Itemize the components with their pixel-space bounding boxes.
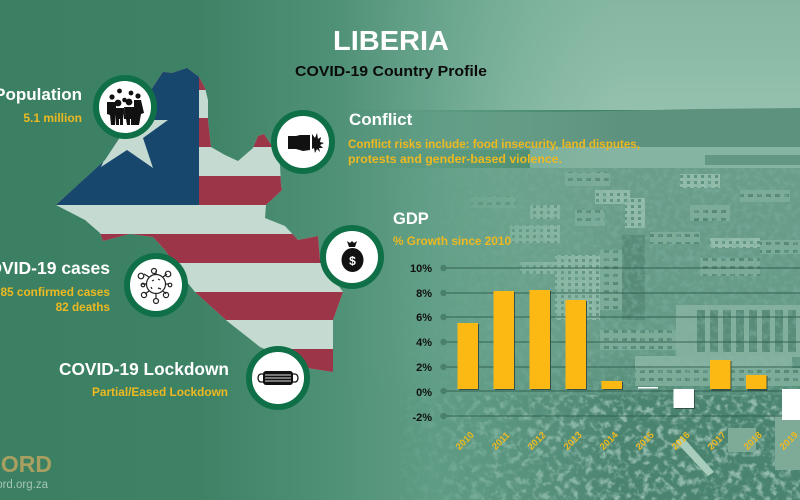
bar chart: GDP growth (410, 263, 800, 453)
yellow bars (458, 290, 766, 389)
x axis year labels: 2012 (526, 430, 549, 453)
COVID-19 cases block (0, 258, 110, 314)
x axis year labels: 2016 (670, 430, 693, 453)
white negative bars (638, 387, 800, 420)
city blocks (470, 172, 800, 276)
y axis labels: 2% (416, 362, 432, 374)
y axis labels: 8% (416, 288, 432, 300)
conflict block (348, 110, 640, 166)
x axis year labels: 2013 (562, 430, 585, 453)
population block (0, 85, 82, 125)
population block: 5.1 million (23, 111, 82, 125)
x axis year labels: 2010 (454, 430, 477, 453)
GDP heading: GDP (393, 210, 429, 228)
title: LIBERIA (333, 25, 449, 56)
COVID-19 lockdown block: Partial/Eased Lockdown (92, 387, 228, 399)
trees (400, 395, 800, 500)
x axis year labels (454, 429, 800, 453)
icon: virus (127, 256, 185, 314)
x axis year labels: 2018 (742, 430, 765, 453)
axis gridlines (443, 268, 800, 416)
x axis year labels: 2019 (778, 430, 800, 453)
x axis year labels: 2015 (634, 429, 657, 453)
GDP heading: % Growth since 2010 (393, 236, 511, 248)
COVID-19 cases block: 82 deaths (56, 300, 110, 314)
icon: people (96, 78, 154, 136)
left green overlay (0, 0, 620, 500)
icon: money bag: $ (349, 254, 356, 268)
large buildings (555, 255, 600, 320)
x axis year labels: 2017 (706, 430, 729, 453)
bar shadows (459, 291, 768, 409)
x axis year labels: 2014 (598, 429, 621, 453)
y axis labels: 4% (416, 337, 432, 349)
conflict block: Conflict risks include: food insecurity, land disputes, (348, 139, 640, 151)
y axis labels: -2% (412, 412, 432, 424)
COVID-19 cases block: 85 confirmed cases (0, 285, 110, 299)
icon: money bag (323, 228, 381, 286)
conflict block: protests and gender-based violence. (348, 154, 562, 166)
conflict block: Conflict (349, 110, 413, 129)
logo (0, 451, 52, 491)
y axis labels (410, 263, 432, 424)
subtitle: COVID-19 Country Profile (295, 63, 487, 80)
COVID-19 lockdown block (59, 359, 229, 399)
COVID-19 lockdown block: COVID-19 Lockdown (59, 359, 229, 379)
y axis labels: 6% (416, 312, 432, 324)
x axis year labels: 2011 (490, 430, 513, 452)
y axis labels: 10% (410, 263, 432, 275)
GDP heading (393, 210, 511, 248)
map of Liberia with flag fill (50, 60, 350, 380)
y axis labels: 0% (416, 387, 432, 399)
icon: mask (249, 349, 307, 407)
icon: fist (274, 113, 332, 171)
